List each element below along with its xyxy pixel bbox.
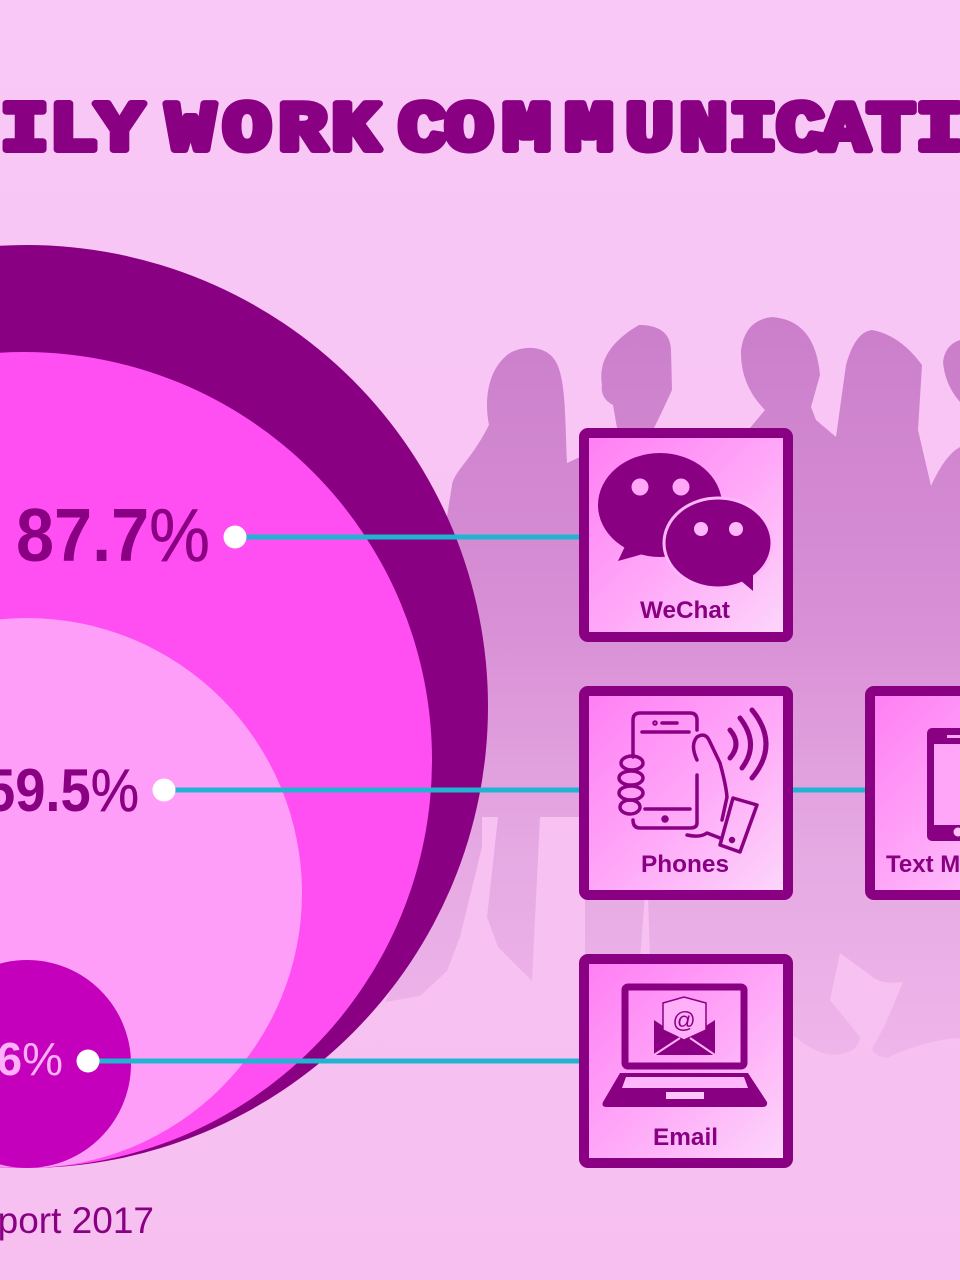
circle: middle <box>0 352 432 1168</box>
node: 59.5% <box>152 778 176 802</box>
icon: laptop with envelope <box>602 987 767 1107</box>
card: Email <box>584 959 788 1163</box>
node: 87.7% <box>224 526 246 548</box>
card: WeChat <box>584 433 788 637</box>
value: 87.7%: 87.7% <box>16 493 210 577</box>
card: Text Messages <box>870 691 960 895</box>
connector: Phones <box>164 788 580 792</box>
icon: WeChat bubbles <box>598 453 772 591</box>
icon: hand holding phone <box>619 710 766 852</box>
icon: smartphone <box>927 728 960 841</box>
circle: outer 87.7% <box>0 245 488 1168</box>
connector: Email <box>88 1058 580 1064</box>
icon: laptop with envelope: @ <box>672 1007 696 1033</box>
label: WeChat: WeChat <box>640 597 730 624</box>
circle: light 59.5% <box>0 618 302 1168</box>
silhouette: group of people <box>385 317 960 1058</box>
node: small <box>76 1050 100 1072</box>
card: Phones <box>584 691 788 895</box>
connector: WeChat <box>235 534 580 540</box>
label: Phones: Phones <box>641 851 729 878</box>
circle: small <box>0 960 131 1168</box>
connector: Phones to Text Messages <box>793 788 866 792</box>
label: Email: Email <box>653 1124 718 1151</box>
silhouette: right head <box>943 340 960 402</box>
